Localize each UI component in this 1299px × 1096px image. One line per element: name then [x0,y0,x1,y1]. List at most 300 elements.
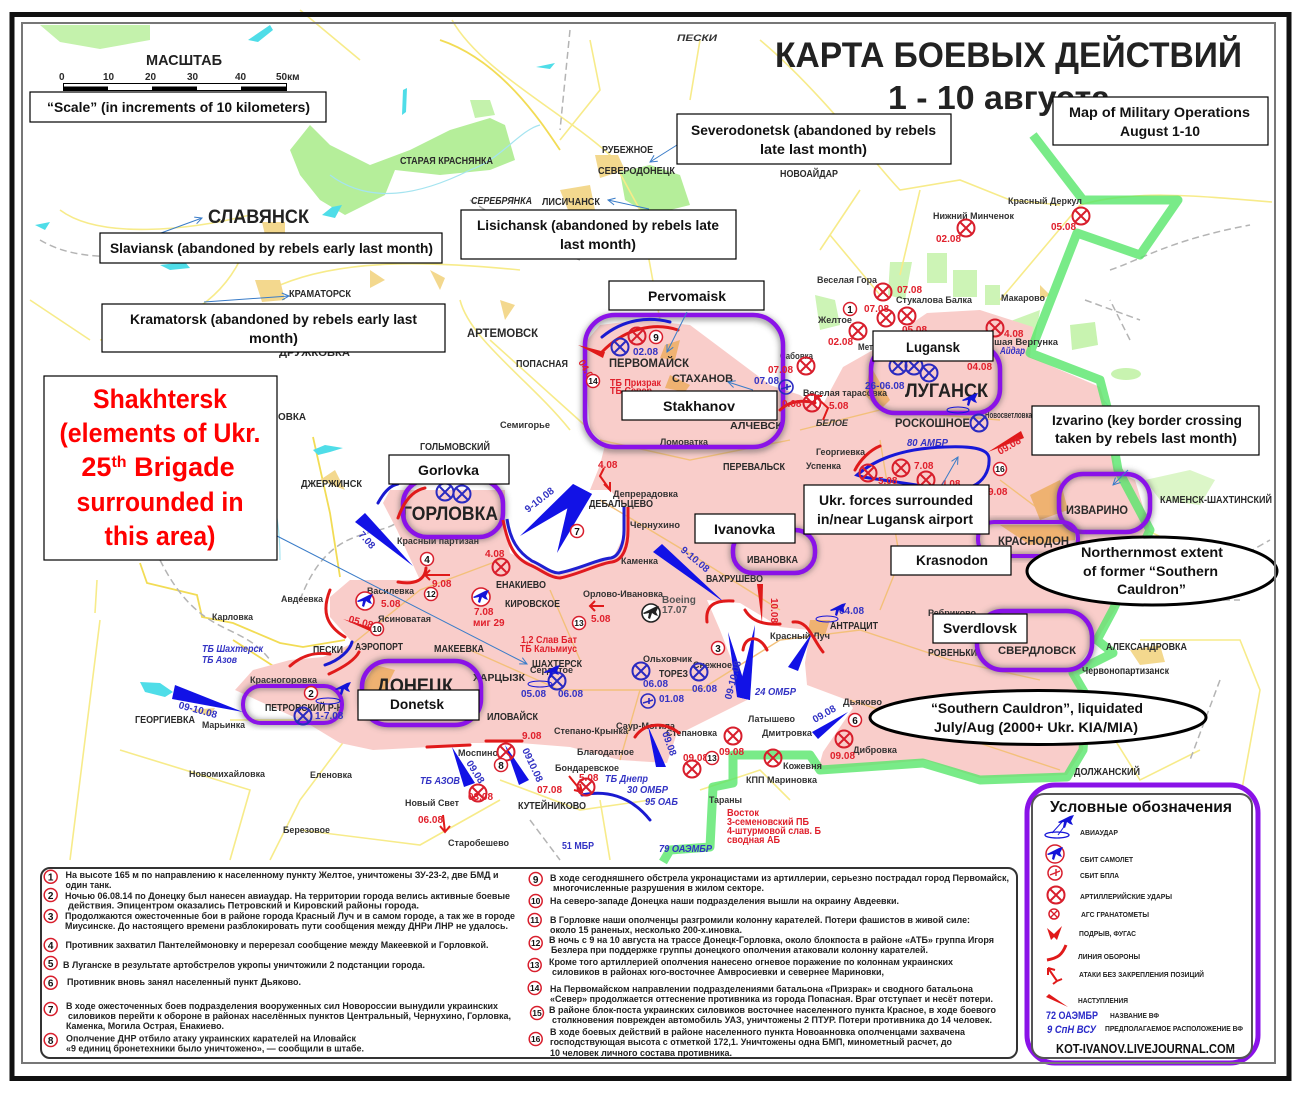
place names: Снежное [693,660,732,671]
numbered event markers on map: 13 [707,753,717,763]
downed aircraft markers: Boeing [662,595,696,606]
callout: scale [30,92,326,122]
rotated blue date labels: 09-10.08 [177,700,219,721]
place names: ИВАНОВКА [747,555,798,566]
callout ellipse: northernmost extent: of former “Southern [1083,563,1218,579]
place names: КРАСНОДОН [998,534,1069,548]
place names: 1,2 Слав Бат [521,635,577,646]
place names: Красный партизан [397,536,479,547]
legend item: attack without holding positions [1048,968,1204,984]
purple highlight: Sverdlovsk [977,611,1092,670]
callout: Slaviansk: Slaviansk (abandoned by rebels early last month) [110,240,433,256]
rotated blue date labels: 9-10.08 [678,545,711,575]
notes panel: events 1 to 8: Каменка, Могила Острая, Енакиево. [66,1021,224,1031]
place names: Успенка [806,461,842,472]
purple highlight: Pervomaisk and Stakhanov [585,315,783,449]
notes panel: events 1 to 8 [41,868,1017,1058]
blue grenade launcher markers and dates: 05.08 [521,689,546,700]
legend item: offensive: НАСТУПЛЕНИЯ [1078,996,1128,1005]
callout: Izvarino: taken by rebels last month) [1055,430,1237,446]
notes panel: events 1 to 8: Ночью 06.08.14 по Донецку был нанесен авиаудар. На территории города велись активные боевые [65,891,510,901]
place names: 30 ОМБР [627,785,668,796]
place names: ПЕРЕВАЛЬСК [723,462,786,473]
title: Russian: 1 - 10 августа [888,79,1111,116]
notes column: events 9 to 16: На северо-западе Донецка наши подразделения вышли на окраину Авдеевки. [550,896,899,906]
blue second lines [325,319,670,820]
red attack arrows without holding ground [425,396,828,832]
place names: СВЕРДЛОВСК [998,645,1076,657]
place names: Благодатное [577,747,634,758]
notes panel: events 1 to 8: 8 [48,1036,54,1047]
callout ellipse: Southern Cauldron [870,690,1206,744]
place names: Червонопартизанск [1082,666,1170,677]
purple highlight: Gorlovka [403,480,503,537]
occupied territory: pink rebel-held area [235,310,1150,778]
legend item: artillery strikes [1048,886,1172,904]
place names: СТАРАЯ КРАСНЯНКА [400,156,493,167]
place names: сводная АБ [727,835,780,846]
notes panel: events 1 to 8: 2 [48,891,54,902]
rotated blue date labels: 09.08 [811,703,839,726]
callout: Sverdlovsk: Sverdlovsk [943,620,1017,636]
legend item: unit name: 72 ОАЭМБР [1046,1010,1098,1022]
place names: Айдар [999,346,1025,357]
place names: Восток [727,808,760,819]
artillery markers and dates: 5.08 [381,599,401,610]
blue grenade launcher markers and dates [294,338,988,724]
purple highlight: Petrovsky district [243,686,342,723]
place names: Красный Луч [770,631,830,642]
place names: СТАХАНОВ [672,373,733,385]
callout: Severodonetsk: late last month) [760,141,867,157]
notes panel: events 1 to 8: 1 [48,873,54,884]
place names: Дьяково [843,697,882,708]
place names: КУТЕЙНИКОВО [518,799,586,812]
numbered event markers on map: 2 [308,689,314,700]
callout: Kramatorsk [102,304,445,352]
callout: Shakhtersk in red: th [111,454,127,471]
legend item: explosion: ПОДРЫВ, ФУГАС [1079,929,1137,938]
place names: Дибровка [853,745,898,756]
place names: ПЕТРОВСКИЙ Р-Н [265,701,343,714]
artillery markers and dates: 07.08 [537,785,562,796]
towns in occupied area [360,340,1075,700]
place names: ТБ Кальмиус [520,644,577,655]
place names: Орлово-Ивановка [583,589,664,600]
green front border line [663,135,1178,862]
callout: Lisichansk: Lisichansk (abandoned by rebels late [477,217,719,233]
place names: Красный Деркул [1008,196,1082,207]
notes column: events 9 to 16: В Горловке наши ополченцы разгромили колонну карателей. Потери фашистов в живой силе: [550,915,970,925]
artillery markers and dates: 05.08 [1051,222,1076,233]
place names: Новомихайловка [189,769,266,780]
place names: КАМЕНСК-ШАХТИНСКИЙ [1160,493,1272,506]
notes panel: events 1 to 8: один танк. [66,880,112,890]
place names: РОСКОШНОЕ [895,416,970,430]
place names: Ясиноватая [378,614,431,625]
callout: English map title [1053,97,1268,145]
place names: Авдеевка [281,594,324,605]
callout: Donetsk [358,690,479,720]
numbered event markers on map: 6 [852,716,858,727]
callout: Shakhtersk in red: Shakhtersk [93,384,228,414]
artillery markers and dates: 9.08 [432,579,452,590]
artillery markers and dates: 04.08 [967,362,992,373]
place names: ОВКА [278,412,306,423]
blue grenade launcher markers and dates: 06.08 [643,679,668,690]
numbered event markers on map: 12 [426,589,436,599]
callout: Ukrainian forces surrounded near airport: in/near Lugansk airport [817,511,973,527]
callout: Lisichansk [461,210,736,259]
artillery markers and dates: 5.08 [829,401,849,412]
place names: Моспино [458,748,498,759]
notes panel: events 1 to 8: Миусинске. До настоящего времени разблокировать пути сообщения между ДНРи ЛНР не удалось. [65,921,508,931]
notes column: events 9 to 16: около 15 раненых, несколько 200-х.иновка. [550,925,742,935]
place names: ИЛОВАЙСК [487,710,539,723]
callout: Severodonetsk [677,114,951,164]
numbered event markers on map: 3 [715,644,721,655]
notes panel: events 1 to 8: На высоте 165 м по направлению к населенному пункту Желтое, уничтожены ЗУ-23-2, две БМД и [66,870,498,880]
place names: АРТЕМОВСК [467,326,539,340]
callout: English map title: Map of Military Operations [1069,104,1250,120]
legend item: grenade launchers: АГС ГРАНАТОМЕТЫ [1081,910,1149,919]
notes column: events 9 to 16 [528,872,1009,1058]
artillery markers and dates: 09.08 [830,751,855,762]
place names: 24 ОМБР [754,687,796,698]
notes panel: events 1 to 8: 6 [48,979,54,990]
map base: forests, water, roads [30,10,1272,860]
callout: Krasnodon: Krasnodon [916,552,988,568]
blue grenade launcher markers and dates: 26-06.08 [865,381,905,392]
place names: 4-штурмовой слав. Б [727,826,821,837]
notes column: events 9 to 16: 16 [531,1034,541,1044]
legend item: defence line: ЛИНИЯ ОБОРОНЫ [1078,952,1140,961]
place names: ТБ АЗОВ [420,776,460,787]
notes column: events 9 to 16: господствующая высота с отметкой 172,1. Уничтожены одна БМП, минометный расчет, до [550,1037,952,1047]
rotated blue date labels: 7.08 [356,530,377,552]
place names: КПП Мариновка [746,775,818,786]
artillery markers and dates: 4.08 [598,460,618,471]
legend item: downed drone: СБИТ БПЛА [1080,871,1120,880]
place names: БЕЛОЕ [816,418,849,429]
place names: АНТРАЦИТ [830,621,878,632]
legend item: assumed unit position: 9 СпН ВСУ [1047,1024,1097,1036]
place names: Еленовка [310,770,353,781]
place names: 95 ОАБ [645,797,678,808]
legend item: unit name: НАЗВАНИЕ ВФ [1110,1011,1160,1020]
callout: Gorlovka [389,455,509,484]
place names: ШАХТЕРСК [532,659,583,670]
artillery markers and dates: 07.08 [897,285,922,296]
place names: АЭРОПОРТ [355,642,403,653]
place names: Красногоровка [250,675,318,686]
place names: Бондаревское [555,763,619,774]
Lugansk airport encirclement [857,447,989,486]
place names: Тараны [709,795,742,806]
callout: scale: “Scale” (in increments of 10 kilometers) [47,99,310,115]
place names: Степано-Крынка [554,726,629,737]
legend item: explosion [1047,926,1137,940]
place names: ГОРЛОВКА [402,504,498,525]
downed aircraft markers [356,588,696,622]
place names: ТБ Азов [202,655,237,666]
place names: ТБ Днепр [605,774,648,785]
callout: Stakhanov: Stakhanov [663,398,735,414]
purple highlight: Lugansk [871,345,1000,413]
place names: Сабовка [780,351,814,362]
callout ellipse: Southern Cauldron: July/Aug (2000+ Ukr. KIA/MIA) [934,719,1138,735]
callout: Lugansk [873,331,993,361]
legend item: defence line [1047,945,1140,961]
place names: Березовое [283,825,330,836]
notes column: events 9 to 16: 12 [531,938,541,948]
legend item: downed drone [1048,866,1120,880]
place names: Веселая Гора [817,275,878,286]
airstrike markers [316,393,978,704]
notes panel: events 1 to 8: Противник вновь занял населенный пункт Дьяково. [67,977,301,987]
numbered event markers on map: 16 [995,464,1005,474]
legend item: airstrike [1045,815,1118,838]
artillery markers and dates: 07.08 [864,304,889,315]
place names: Большая Вергунка [970,337,1059,348]
title: Russian [775,35,1242,116]
notes column: events 9 to 16: В ходе боевых действий в районе населенного пункта Новоанновка ополченцами захвачена [550,1027,966,1037]
notes column: events 9 to 16: силовиков в районах юго-восточнее Амвросиевки и севернее Мариновки, [552,967,884,977]
artillery markers and dates: 7.08 [914,461,934,472]
place names: АЛЧЕВСК [730,421,783,432]
place names: Сердитое [530,665,573,676]
place names: ТБ Призрак [610,378,662,389]
place names: Марьинка [202,720,246,731]
place names: Чернухино [630,520,680,531]
artillery markers and dates: 05.08 [902,325,927,336]
rotated blue date labels [177,486,839,786]
notes column: events 9 to 16: В ночь с 9 на 10 августа на трассе Донецк-Горловка, около блокпоста в районе «АТБ» группа Игоря [549,935,994,945]
place names: Дмитровка [762,728,813,739]
place names: Веселая тарасовка [803,388,888,399]
notes column: events 9 to 16: 10 [531,896,541,906]
artillery markers and dates: 09.08 [683,753,708,764]
thin blue annotation arrows [161,145,1128,664]
place names: ПЕРВОМАЙСК [609,355,690,370]
place names: 80 АМБР [907,438,948,449]
numbered event markers on map: 10 [372,624,382,634]
numbered event markers on map: 9 [653,333,659,344]
place names: Новосветловка [985,410,1032,421]
place names: ТБ Север [610,386,652,397]
blue grenade launcher markers and dates: 01.08 [659,694,684,705]
legend item: unit name [1046,1010,1160,1022]
artillery markers and dates: 4.08 [485,549,505,560]
callout: Pervomaisk [609,281,764,310]
notes panel: events 1 to 8: 7 [48,1005,54,1016]
scale bar: 40 [235,72,247,83]
place names: Карловка [212,612,254,623]
notes panel: events 1 to 8: В ходе ожесточенных боев подразделения вооруженных сил Новороссии вынудили украинских [66,1001,498,1011]
callout: Ukrainian forces surrounded near airport [804,485,989,534]
numbered event markers on map: 8 [498,761,504,772]
scale bar: 20 [145,72,157,83]
artillery markers and dates: 5.08 [579,773,599,784]
place names [135,33,1272,855]
scale bar: 0 [59,72,65,83]
place names: ТОРЕЗ [659,669,688,680]
place names: ИЗВАРИНО [1066,503,1128,517]
legend item: downed aircraft [1046,845,1133,864]
notes panel: events 1 to 8: Ополчение ДНР отбило атаку украинских карателей на Иловайск [66,1034,356,1044]
callout: Stakhanov [622,391,777,420]
place names: ГОЛЬМОВСКИЙ [420,440,490,453]
place names: 51 МБР [562,841,594,852]
legend item: grenade launchers [1049,909,1149,919]
legend title: Условные обозначения [1050,799,1232,816]
place names: ЛИСИЧАНСК [542,197,601,208]
place names: ДРУЖКОВКА [279,348,350,359]
callout ellipse: Southern Cauldron: “Southern Cauldron”, liquidated [931,700,1143,716]
place names: СЛАВЯНСК [208,207,309,228]
place names: ЛУГАНСК [905,381,988,402]
artillery markers and dates: 04.08 [575,358,598,386]
callout: Shakhtersk in red: (elements of Ukr. [60,418,260,448]
numbered event markers on map: 1 [847,305,853,316]
notes column: events 9 to 16: многочисленные разрушения в жилом секторе. [553,883,764,893]
notes column: events 9 to 16: 13 [530,960,540,970]
notes column: events 9 to 16: 11 [530,915,539,925]
notes column: events 9 to 16: Безлера при поддержке группы донецкого ополчения атаковали колонну карателей. [551,945,928,955]
title: Russian: КАРТА БОЕВЫХ ДЕЙСТВИЙ [775,35,1242,75]
place names: Латышево [748,714,795,725]
callout: Krasnodon [891,546,1011,575]
notes panel: events 1 to 8: В Луганске в результате артобстрелов укропы уничтожили 2 подстанции города. [63,960,425,970]
notes panel: events 1 to 8: Продолжаются ожесточенные бои в районе города Красный Луч и в самом городе, а так же в городе [65,911,515,921]
artillery markers and dates: 9.08 [988,487,1008,498]
downed aircraft markers: 17.07 [662,605,687,616]
purple highlight: Krasnodon [978,522,1078,556]
callout: Severodonetsk: Severodonetsk (abandoned by rebels [691,122,936,138]
place names: Новый Свет [405,798,459,809]
place names: Мет [858,342,873,353]
blue grenade launcher markers and dates: 04.08 [839,606,864,617]
place names: СЕРЕБРЯНКА [471,196,532,207]
place names: ДЕБАЛЬЦЕВО [589,499,653,510]
callout: Shakhtersk in red: Brigade [127,452,235,482]
notes column: events 9 to 16: В районе блок-поста украинских силовиков восточнее населенного пункта Красное, в ходе боевого [549,1005,997,1015]
place names: Ребриково [928,608,976,619]
numbered event markers on map: 14 [588,376,598,386]
legend item: attack without holding positions: АТАКИ БЕЗ ЗАКРЕПЛЕНИЯ ПОЗИЦИЙ [1079,970,1204,979]
artillery markers and dates [347,208,1090,826]
callout: Pervomaisk: Pervomaisk [648,288,726,304]
callout: Izvarino: Izvarino (key border crossing [1052,412,1242,428]
notes panel: events 1 to 8: 3 [48,912,54,923]
place names: ЕНАКИЕВО [496,580,546,591]
legend item: offensive [1046,994,1128,1007]
callout: Ivanovka: Ivanovka [714,521,775,537]
place names: Ольховчик [643,654,692,665]
blue grenade launcher markers and dates: 06.08 [558,689,583,700]
place names: ДЖЕРЖИНСК [301,479,363,490]
numbered event markers on map: 4 [424,555,430,566]
red defence lines [290,327,880,747]
notes column: events 9 to 16: Кроме того артиллерией ополчения нанесено огневое поражение по колоннам украинских [549,957,953,967]
callout: Shakhtersk in red: this area) [104,521,216,551]
notes panel: events 1 to 8: «9 единиц бронетехники было уничтожено», — сообщили в штабе. [66,1044,364,1054]
notes column: events 9 to 16: столкновения поврежден автомобиль УАЗ, уничтожены 2 ПТУР. Потери противника до 14 человек. [552,1015,992,1025]
callout: Izvarino [1032,406,1259,455]
artillery markers and dates: 4.08 [941,479,961,490]
scale title: МАСШТАБ [146,52,222,69]
place names: Желтое [817,315,852,326]
purple highlight: Ivanovka [733,530,815,573]
place names: ХАРЦЫЗК [473,673,526,684]
place names: ДОНЕЦК [377,676,453,697]
place names: Василевка [367,586,415,597]
place names: Стукалова Балка [896,295,973,306]
callout: Shakhtersk in red [44,376,277,560]
notes column: events 9 to 16: 10 человек личного состава противника. [550,1048,732,1058]
notes panel: events 1 to 8: действия. Эпицентром оказались Петровский и Кировский районы города. [68,900,419,910]
place names: Семигорье [500,420,550,431]
purple highlight: Izvarino [1059,474,1150,532]
blue offensive arrows [172,484,848,787]
callout: Shakhtersk in red: surrounded in [76,487,244,517]
scale bar: 50км [276,72,300,83]
legend item: assumed unit position [1047,1024,1244,1036]
place names: МАКЕЕВКА [434,644,484,655]
callout: Donetsk: Donetsk [390,696,444,712]
notes column: events 9 to 16: 14 [530,983,540,993]
place names: Кожевня [783,761,822,772]
rotated blue date labels: 0910.08 [519,747,545,784]
artillery markers and dates: 06.08 [418,815,443,826]
notes panel: events 1 to 8: 5 [48,959,54,970]
notes panel: events 1 to 8: силовиков перейти к обороне в районах населённых пунктов Центральный, Чернухино, Горловка, [68,1011,511,1021]
place names: ВАХРУШЕВО [706,574,763,585]
place names: ПЕСКИ [313,645,343,656]
place names: ДОЛЖАНСКИЙ [1074,765,1140,778]
artillery markers and dates: миг 29 [473,618,505,629]
place names: 79 ОАЭМБР [659,844,712,855]
artillery markers and dates: 10.08 [768,598,779,623]
blue grenade launcher markers and dates: 02.08 [633,347,658,358]
callout: Kramatorsk: Kramatorsk (abandoned by rebels early last [130,311,417,327]
rotated blue date labels: 09-10.08 [723,659,744,701]
legend item: downed aircraft: СБИТ САМОЛЕТ [1080,855,1133,864]
callout ellipse: northernmost extent: Cauldron” [1117,581,1186,597]
numbered event markers on map [304,302,1006,772]
artillery markers and dates: 5.08 [878,476,898,487]
place names: КИРОВСКОЕ [505,599,560,610]
place names: НОВОАЙДАР [780,167,838,180]
notes column: events 9 to 16: В ходе сегодняшнего обстрела укронацистами из артиллерии, серьезно пострадал город Первомайск, [550,873,1009,883]
artillery markers and dates: 05.08 [347,614,375,631]
artillery markers and dates: 03.08 [468,792,493,803]
artillery markers and dates: 07.08 [768,365,793,376]
legend item: assumed unit position: ПРЕДПОЛАГАЕМОЕ РАСПОЛОЖЕНИЕ ВФ [1105,1024,1244,1033]
callout: Sverdlovsk [933,614,1027,643]
notes panel: events 1 to 8: Противник захватил Пантелеймоновку и перерезал сообщение между Макеевкой и Горловкой. [66,940,488,950]
artillery markers and dates: 7.08 [474,607,494,618]
rotated blue date labels: 9-10.08 [523,486,557,515]
rotated blue date labels: 09.08 [659,730,678,758]
blue grenade launcher markers and dates: 07.08 [754,376,779,387]
artillery markers and dates: 5.08 [591,614,611,625]
rotated blue date labels: 09.08 [463,759,486,786]
blue grenade launcher markers and dates: 06.08 [692,684,717,695]
artillery markers and dates: 09.08 [996,435,1024,458]
place names: ТБ Шахтерск [202,644,264,655]
blue grenade launcher markers and dates: 1-7.08 [315,711,344,722]
